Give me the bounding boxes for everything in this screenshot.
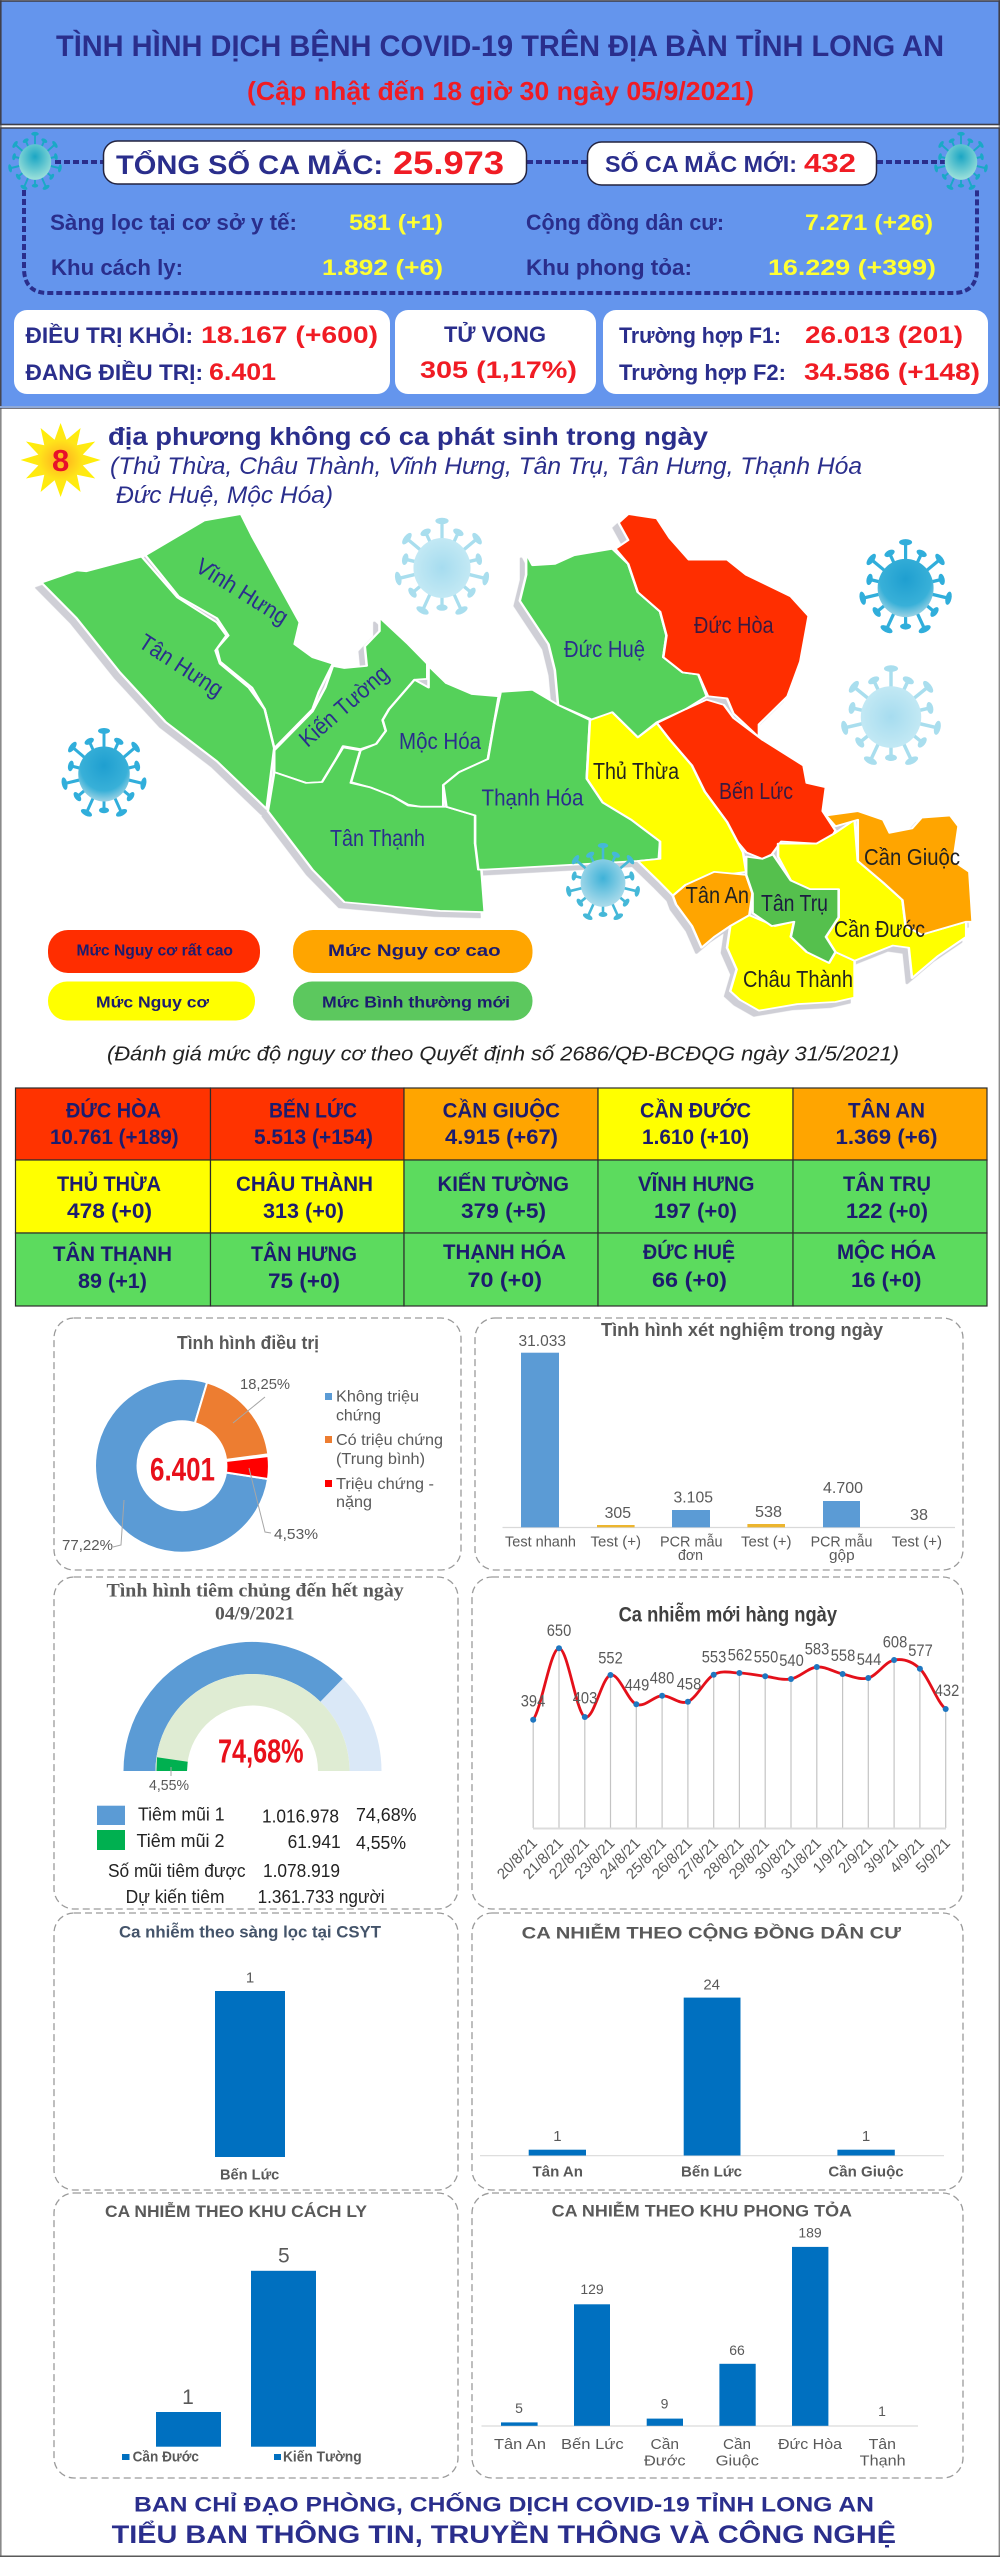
new cases box: 432 (804, 148, 856, 178)
data values: 432 (935, 1681, 959, 1700)
axis labels: Cần (650, 2436, 679, 2453)
vaccine legend table: 1.361.733 người (258, 1887, 385, 1907)
table of districts (16, 1088, 987, 1306)
table of districts: ĐỨC HUỆ (643, 1240, 735, 1264)
breakdown by source: Cộng đồng dân cư: (526, 210, 724, 235)
bar values (553, 1977, 870, 2145)
zero-case localities text: Đức Huệ, Mộc Hóa) (116, 482, 333, 509)
panel: daily testing bar chart (475, 1318, 963, 1570)
donut legend: chứng (336, 1408, 381, 1425)
donut legend: nặng (336, 1494, 372, 1511)
donut leaders and labels (62, 1376, 318, 1554)
update date subtitle: (Cập nhật đến 18 giờ 30 ngày 05/9/2021) (247, 76, 754, 106)
risk level legend (48, 930, 532, 1020)
icon: sun badge with 8: 8 (52, 443, 69, 478)
legend: Kiến Tường (283, 2448, 362, 2465)
district labels: Đức Huệ (564, 636, 645, 662)
date axis labels: 2/9/21 (835, 1835, 876, 1877)
legend: very high risk: Mức Nguy cơ rất cao (76, 942, 233, 960)
panel: quarantine area cases (54, 2193, 458, 2478)
data values: 558 (831, 1646, 855, 1665)
total cases box: 25.973 (393, 145, 504, 181)
axis labels: Tân An (532, 2164, 583, 2180)
data values (521, 1621, 959, 1711)
bars (156, 2271, 316, 2447)
panel: cases from health facility screening (54, 1913, 458, 2190)
legend: high risk (293, 930, 532, 973)
drop lines and axis (533, 1648, 946, 1828)
bars (480, 1998, 944, 2156)
district labels: Tân Trụ (761, 890, 828, 916)
bar values: 5 (515, 2400, 523, 2416)
date axis labels: 1/9/21 (810, 1835, 851, 1877)
table of districts: TÂN THẠNH (53, 1242, 172, 1266)
data values: 394 (521, 1692, 545, 1711)
district labels: Thạnh Hóa (482, 784, 584, 810)
data values: 458 (677, 1674, 701, 1693)
donut legend: (Trung bình) (336, 1451, 425, 1468)
footer (112, 2493, 896, 2549)
breakdown by source: Khu phong tỏa: (526, 255, 692, 280)
date axis labels: 30/8/21 (752, 1835, 799, 1883)
axis labels: Tân (869, 2436, 896, 2453)
header banner (1, 1, 999, 124)
axis labels: Đức Hòa (778, 2436, 843, 2453)
bar values: 38 (910, 1507, 928, 1524)
data values: 552 (598, 1648, 623, 1667)
legend: risk: Mức Nguy cơ (96, 995, 210, 1012)
heading: CA NHIỄM THEO KHU CÁCH LY (105, 2202, 368, 2221)
date axis labels: 31/8/21 (778, 1835, 825, 1883)
bar values: 24 (703, 1977, 720, 1994)
axis labels: Test (+) (590, 1534, 641, 1551)
panel: daily new cases line chart (472, 1577, 963, 1909)
heading: 04/9/2021 (215, 1603, 295, 1624)
axis labels (494, 2436, 906, 2470)
F1 F2 box: Trường hợp F1: (619, 323, 781, 348)
axis labels: Cần (723, 2436, 751, 2453)
date axis labels: 29/8/21 (726, 1835, 773, 1883)
breakdown by source: 16.229 (+399) (768, 255, 936, 280)
table of districts: TÂN HƯNG (251, 1242, 357, 1266)
heading: Ca nhiễm theo sàng lọc tại CSYT (119, 1923, 382, 1942)
donut leaders and labels: 18,25% (240, 1376, 290, 1393)
vaccine legend table: 74,68% (356, 1805, 416, 1825)
footer line 2: TIỂU BAN THÔNG TIN, TRUYỀN THÔNG VÀ CÔNG NGHỆ (112, 2519, 896, 2549)
date axis labels: 4/9/21 (887, 1835, 928, 1877)
district labels: Bến Lức (719, 778, 793, 804)
date axis labels (494, 1835, 954, 1883)
bar values: 189 (798, 2225, 822, 2241)
table of districts: 66 (+0) (652, 1269, 727, 1292)
icon: virus left (8, 132, 62, 191)
breakdown by source: 581 (+1) (349, 210, 443, 235)
date axis labels: 23/8/21 (571, 1835, 618, 1883)
F1 F2 box: Trường hợp F2: (619, 360, 786, 385)
title: TÌNH HÌNH DỊCH BỆNH COVID-19 TRÊN ĐỊA BÀN TỈNH LONG AN (56, 29, 944, 63)
axis labels: Bến Lức (561, 2436, 624, 2453)
legend: new normal (293, 982, 532, 1020)
district labels: Tân Hưng (134, 629, 228, 702)
deaths box: TỬ VONG (444, 322, 546, 347)
assessment note: (Đánh giá mức độ nguy cơ theo Quyết định số 2686/QĐ-BCĐQG ngày 31/5/2021) (107, 1044, 899, 1066)
icon: virus right (934, 132, 988, 191)
icon: light virus right (840, 665, 942, 767)
data values: 608 (883, 1632, 907, 1651)
district labels: Tân An (686, 882, 749, 908)
vaccine legend table: 61.941 (288, 1832, 341, 1852)
new cases box (588, 142, 876, 185)
gauge percent: 74,68% (218, 1733, 304, 1770)
table of districts: 1.610 (+10) (642, 1126, 749, 1149)
bar values: 3.105 (674, 1490, 713, 1507)
data values: 480 (650, 1668, 674, 1687)
donut leaders and labels: 77,22% (62, 1537, 113, 1554)
smoothed line (533, 1648, 946, 1720)
district labels: Kiến Tường (294, 660, 394, 752)
data values: 544 (857, 1650, 881, 1669)
table of districts: 379 (+5) (461, 1200, 546, 1223)
table of districts: CẦN GIUỘC (443, 1099, 560, 1123)
bar values: 4.700 (823, 1480, 863, 1497)
panel: community cases (472, 1913, 963, 2190)
axis labels: Đước (644, 2453, 686, 2470)
axis labels: Giuộc (716, 2453, 760, 2470)
total cases box: TỔNG SỐ CA MẮC: (116, 148, 383, 180)
table of districts: TÂN AN (848, 1099, 925, 1123)
data values: 550 (754, 1648, 778, 1667)
table of districts: 10.761 (+189) (50, 1126, 179, 1149)
table of districts: 4.915 (+67) (445, 1126, 558, 1149)
table of districts: 313 (+0) (263, 1200, 344, 1223)
table of districts: CẦN ĐƯỚC (640, 1099, 751, 1123)
bars (482, 2247, 918, 2426)
zero-case localities text: địa phương không có ca phát sinh trong ngày (108, 423, 708, 451)
gauge chart (123, 1642, 382, 1771)
vaccine legend table: 4,55% (356, 1833, 406, 1853)
axis labels: Test (+) (892, 1534, 942, 1551)
district labels: Đức Hòa (694, 612, 774, 638)
date axis labels: 27/8/21 (675, 1835, 722, 1883)
legend: new normal: Mức Bình thường mới (322, 995, 510, 1012)
footer line 1: BAN CHỈ ĐẠO PHÒNG, CHỐNG DỊCH COVID-19 TỈNH LONG AN (134, 2493, 874, 2517)
icon: dark virus left (61, 728, 147, 818)
breakdown by source: 7.271 (+26) (805, 210, 933, 235)
district labels: Thủ Thừa (593, 758, 679, 784)
axis labels: đơn (678, 1547, 703, 1564)
donut chart (95, 1379, 269, 1553)
district labels: Mộc Hóa (399, 728, 481, 754)
date axis labels: 22/8/21 (546, 1835, 593, 1883)
axis labels (505, 1534, 942, 1564)
bar values: 305 (605, 1505, 631, 1522)
breakdown by source (50, 210, 936, 280)
donut leaders and labels: 4,53% (274, 1526, 318, 1543)
icon: sun badge with 8 (21, 423, 101, 497)
district labels: Cần Giuộc (864, 844, 960, 870)
bar values: 1 (878, 2403, 886, 2419)
date axis labels: 3/9/21 (861, 1835, 902, 1877)
table of districts: 478 (+0) (67, 1200, 152, 1223)
date axis labels: 20/8/21 (494, 1835, 541, 1883)
table of districts: 16 (+0) (851, 1269, 922, 1292)
recovered and treating box: ĐIỀU TRỊ KHỎI: (26, 323, 193, 348)
dashed connector frame (24, 162, 977, 293)
F1 F2 box (603, 310, 988, 394)
vaccine legend table (97, 1805, 416, 1907)
bar values: 1 (182, 2386, 194, 2409)
zero-case localities text (108, 423, 862, 509)
table of districts: TÂN TRỤ (843, 1172, 931, 1196)
table of districts: KIẾN TƯỜNG (438, 1172, 569, 1196)
date axis labels: 5/9/21 (913, 1835, 954, 1877)
second dose label (149, 1767, 189, 1794)
axis labels: PCR mẫu (811, 1534, 872, 1551)
panel: treatment status donut (54, 1318, 461, 1570)
panel: lockdown area cases (472, 2193, 963, 2478)
heading (106, 1581, 404, 1624)
panel: vaccination gauge (54, 1577, 458, 1909)
table of districts: 89 (+1) (78, 1270, 147, 1293)
heading: Tình hình xét nghiệm trong ngày (601, 1320, 883, 1340)
bar values: 66 (729, 2342, 745, 2358)
bar values: 129 (580, 2281, 604, 2297)
data values: 577 (908, 1641, 933, 1660)
bar values: 1 (862, 2128, 870, 2145)
new cases box: SỐ CA MẮC MỚI: (605, 150, 797, 177)
table of districts: 122 (+0) (846, 1200, 928, 1223)
F1 F2 box: 34.586 (+148) (804, 359, 980, 386)
heading: Ca nhiễm mới hàng ngày (619, 1603, 837, 1627)
table of districts: 75 (+0) (268, 1270, 340, 1293)
bar values: 31.033 (518, 1333, 566, 1350)
data values: 553 (702, 1648, 726, 1667)
bar label: Bến Lức (220, 2166, 279, 2183)
bar values (182, 2244, 290, 2409)
axis labels (532, 2164, 904, 2180)
axis labels: gộp (829, 1547, 855, 1564)
heading: Tình hình tiêm chủng đến hết ngày (106, 1581, 404, 1602)
legend (122, 2448, 362, 2465)
total cases box (104, 141, 526, 184)
risk map of districts (41, 514, 973, 1011)
vaccine legend table: 1.016.978 (262, 1807, 339, 1827)
district labels (134, 553, 960, 992)
data values: 562 (728, 1646, 752, 1665)
bar values: 5 (278, 2244, 290, 2267)
data values: 650 (547, 1621, 571, 1640)
second dose label: 4,55% (149, 1777, 189, 1794)
date axis labels: 24/8/21 (597, 1835, 644, 1883)
zero-case localities text: (Thủ Thừa, Châu Thành, Vĩnh Hưng, Tân Trụ, Tân Hưng, Thạnh Hóa (110, 453, 862, 480)
axis labels: Thạnh (860, 2453, 906, 2470)
deaths box (395, 310, 596, 394)
table of districts: 5.513 (+154) (254, 1126, 373, 1149)
heading: CA NHIỄM THEO KHU PHONG TỎA (552, 2201, 852, 2220)
recovered and treating box: ĐANG ĐIỀU TRỊ: (26, 360, 203, 385)
table of districts: CHÂU THÀNH (236, 1172, 373, 1196)
axis labels: Tân An (494, 2436, 546, 2453)
bar values: 1 (553, 2128, 562, 2145)
district labels: Cần Đước (834, 916, 925, 942)
data values: 403 (573, 1688, 597, 1707)
bar values: 9 (661, 2396, 669, 2412)
legend: high risk: Mức Nguy cơ cao (328, 941, 501, 960)
date axis labels: 25/8/21 (623, 1835, 670, 1883)
breakdown by source: Khu cách ly: (51, 255, 183, 280)
table of districts: 1.369 (+6) (836, 1126, 938, 1149)
data values: 540 (779, 1651, 804, 1670)
breakdown by source: Sàng lọc tại cơ sở y tế: (50, 210, 297, 235)
heading: Tình hình điều trị (177, 1333, 319, 1353)
table of districts: THẠNH HÓA (443, 1240, 566, 1264)
table of districts: THỦ THỪA (57, 1172, 161, 1196)
table of districts: VĨNH HƯNG (638, 1173, 754, 1196)
donut centre value: 6.401 (150, 1452, 215, 1488)
data points (530, 1645, 949, 1723)
recovered and treating box (14, 310, 390, 394)
breakdown by source: 1.892 (+6) (322, 255, 443, 280)
bar values: 538 (755, 1504, 782, 1521)
table of districts: 70 (+0) (468, 1269, 542, 1292)
icon: light virus top centre (394, 518, 490, 616)
table of districts: BẾN LỨC (269, 1099, 357, 1123)
axis labels: Test nhanh (505, 1534, 576, 1551)
vaccine legend table: Tiêm mũi 1 (138, 1805, 224, 1825)
table of districts: ĐỨC HÒA (66, 1099, 161, 1123)
axis labels: Cần Giuộc (828, 2164, 904, 2180)
bar values (515, 2225, 886, 2419)
donut legend (325, 1389, 443, 1511)
vaccine legend table: Số mũi tiêm được (108, 1861, 246, 1881)
F1 F2 box: 26.013 (201) (805, 322, 963, 349)
donut legend: Không triệu (336, 1389, 419, 1406)
vaccine legend table: Dự kiến tiêm (126, 1887, 224, 1907)
recovered and treating box: 18.167 (+600) (201, 322, 378, 349)
icon: dark virus top right (858, 539, 953, 635)
legend: Cần Đước (133, 2448, 199, 2465)
donut legend: Có triệu chứng (336, 1432, 443, 1449)
axis labels: Bến Lức (681, 2164, 742, 2180)
panel: case totals (0, 128, 1000, 408)
legend: risk (48, 982, 255, 1020)
district labels: Tân Thạnh (330, 825, 425, 851)
district labels: Vĩnh Hưng (191, 553, 293, 630)
axis labels: PCR mẫu (660, 1534, 723, 1551)
donut legend: Triệu chứng - (336, 1476, 434, 1493)
date axis labels: 28/8/21 (700, 1835, 747, 1883)
bars (502, 1353, 955, 1528)
data values: 583 (805, 1639, 829, 1658)
vaccine legend table: Tiêm mũi 2 (136, 1831, 224, 1851)
heading: CA NHIỄM THEO CỘNG ĐỒNG DÂN CƯ (522, 1924, 902, 1942)
deaths box: 305 (1,17%) (420, 357, 577, 384)
table of districts: 197 (+0) (654, 1200, 737, 1223)
icon: mid virus over map (565, 843, 641, 921)
recovered and treating box: 6.401 (209, 359, 276, 386)
data values: 449 (625, 1676, 649, 1695)
vaccine legend table: 1.078.919 (263, 1861, 340, 1881)
date axis labels: 21/8/21 (520, 1835, 567, 1883)
legend: very high risk (48, 930, 260, 973)
bar value: 1 (246, 1970, 254, 1986)
district labels: Châu Thành (743, 966, 853, 992)
table of districts: MỘC HÓA (837, 1240, 936, 1264)
bar (215, 1991, 285, 2157)
date axis labels: 26/8/21 (649, 1835, 696, 1883)
bar values (518, 1333, 928, 1524)
axis labels: Test (+) (741, 1534, 792, 1551)
